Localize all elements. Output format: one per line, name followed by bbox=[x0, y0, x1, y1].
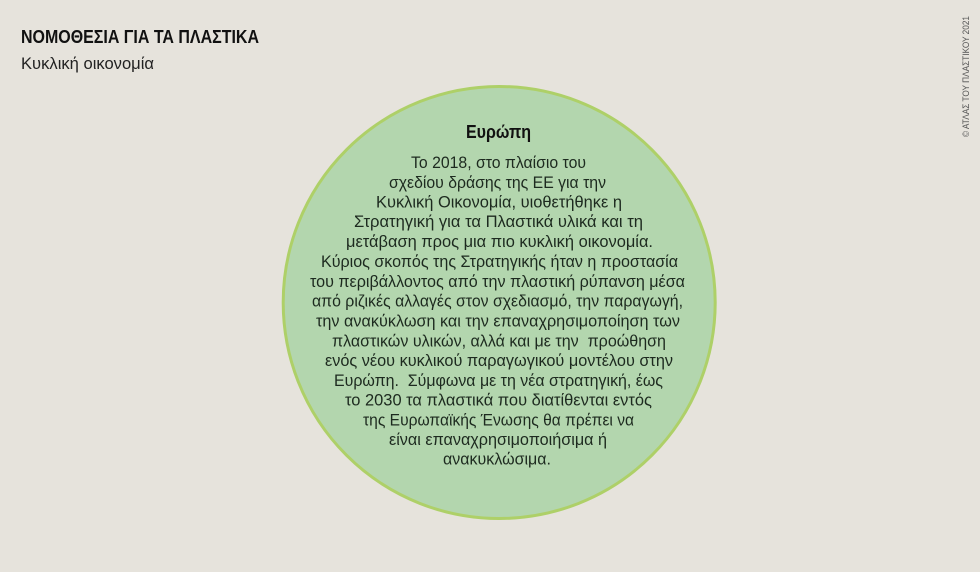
text block: Europe body bbox=[310, 154, 685, 468]
text block: Europe body: πλαστικών υλικών, αλλά και με την προώθηση bbox=[332, 332, 666, 350]
heading: Europe: Ευρώπη bbox=[466, 121, 531, 142]
text block: Europe body: ανακυκλώσιμα. bbox=[443, 450, 551, 468]
text block: Europe body: από ριζικές αλλαγές στον σχεδιασμό, την παραγωγή, bbox=[312, 292, 683, 310]
text block: Europe body: Στρατηγική για τα Πλαστικά υλικά και τη bbox=[354, 213, 643, 231]
subtitle: Κυκλική οικονομία bbox=[21, 54, 154, 73]
text block: Europe body: Κύριος σκοπός της Στρατηγικής ήταν η προστασία bbox=[321, 253, 678, 271]
text block: Europe body: Το 2018, στο πλαίσιο του bbox=[411, 154, 586, 172]
text block: Europe body: την ανακύκλωση και την επαναχρησιμοποίηση των bbox=[316, 312, 680, 330]
text block: Europe body: ενός νέου κυκλικού παραγωγικού μοντέλου στην bbox=[325, 352, 673, 370]
text block: Europe body: Κυκλική Οικονομία, υιοθετήθηκε η bbox=[376, 194, 622, 212]
text block: Europe body: Ευρώπη. Σύμφωνα με τη νέα στρατηγική, έως bbox=[334, 372, 663, 390]
text block: Europe body: της Ευρωπαϊκής Ένωσης θα πρέπει να bbox=[363, 412, 634, 430]
panel: Europe circle bbox=[283, 86, 715, 518]
title: ΝΟΜΟΘΕΣΙΑ ΓΙΑ ΤΑ ΠΛΑΣΤΙΚΑ bbox=[21, 26, 259, 47]
text block: Europe body: μετάβαση προς μια πιο κυκλική οικονομία. bbox=[346, 233, 653, 251]
text block: Europe body: είναι επαναχρησιμοποιήσιμα ή bbox=[389, 431, 607, 449]
copyright credit: © ΑΤΛΑΣ ΤΟΥ ΠΛΑΣΤΙΚΟΥ 2021 bbox=[961, 16, 972, 137]
text block: Europe body: του περιβάλλοντος από την πλαστική ρύπανση μέσα bbox=[310, 273, 685, 291]
text block: Europe body: το 2030 τα πλαστικά που διατίθενται εντός bbox=[345, 392, 652, 410]
text block: Europe body: σχεδίου δράσης της ΕΕ για την bbox=[389, 174, 606, 192]
circle background bbox=[283, 86, 715, 518]
